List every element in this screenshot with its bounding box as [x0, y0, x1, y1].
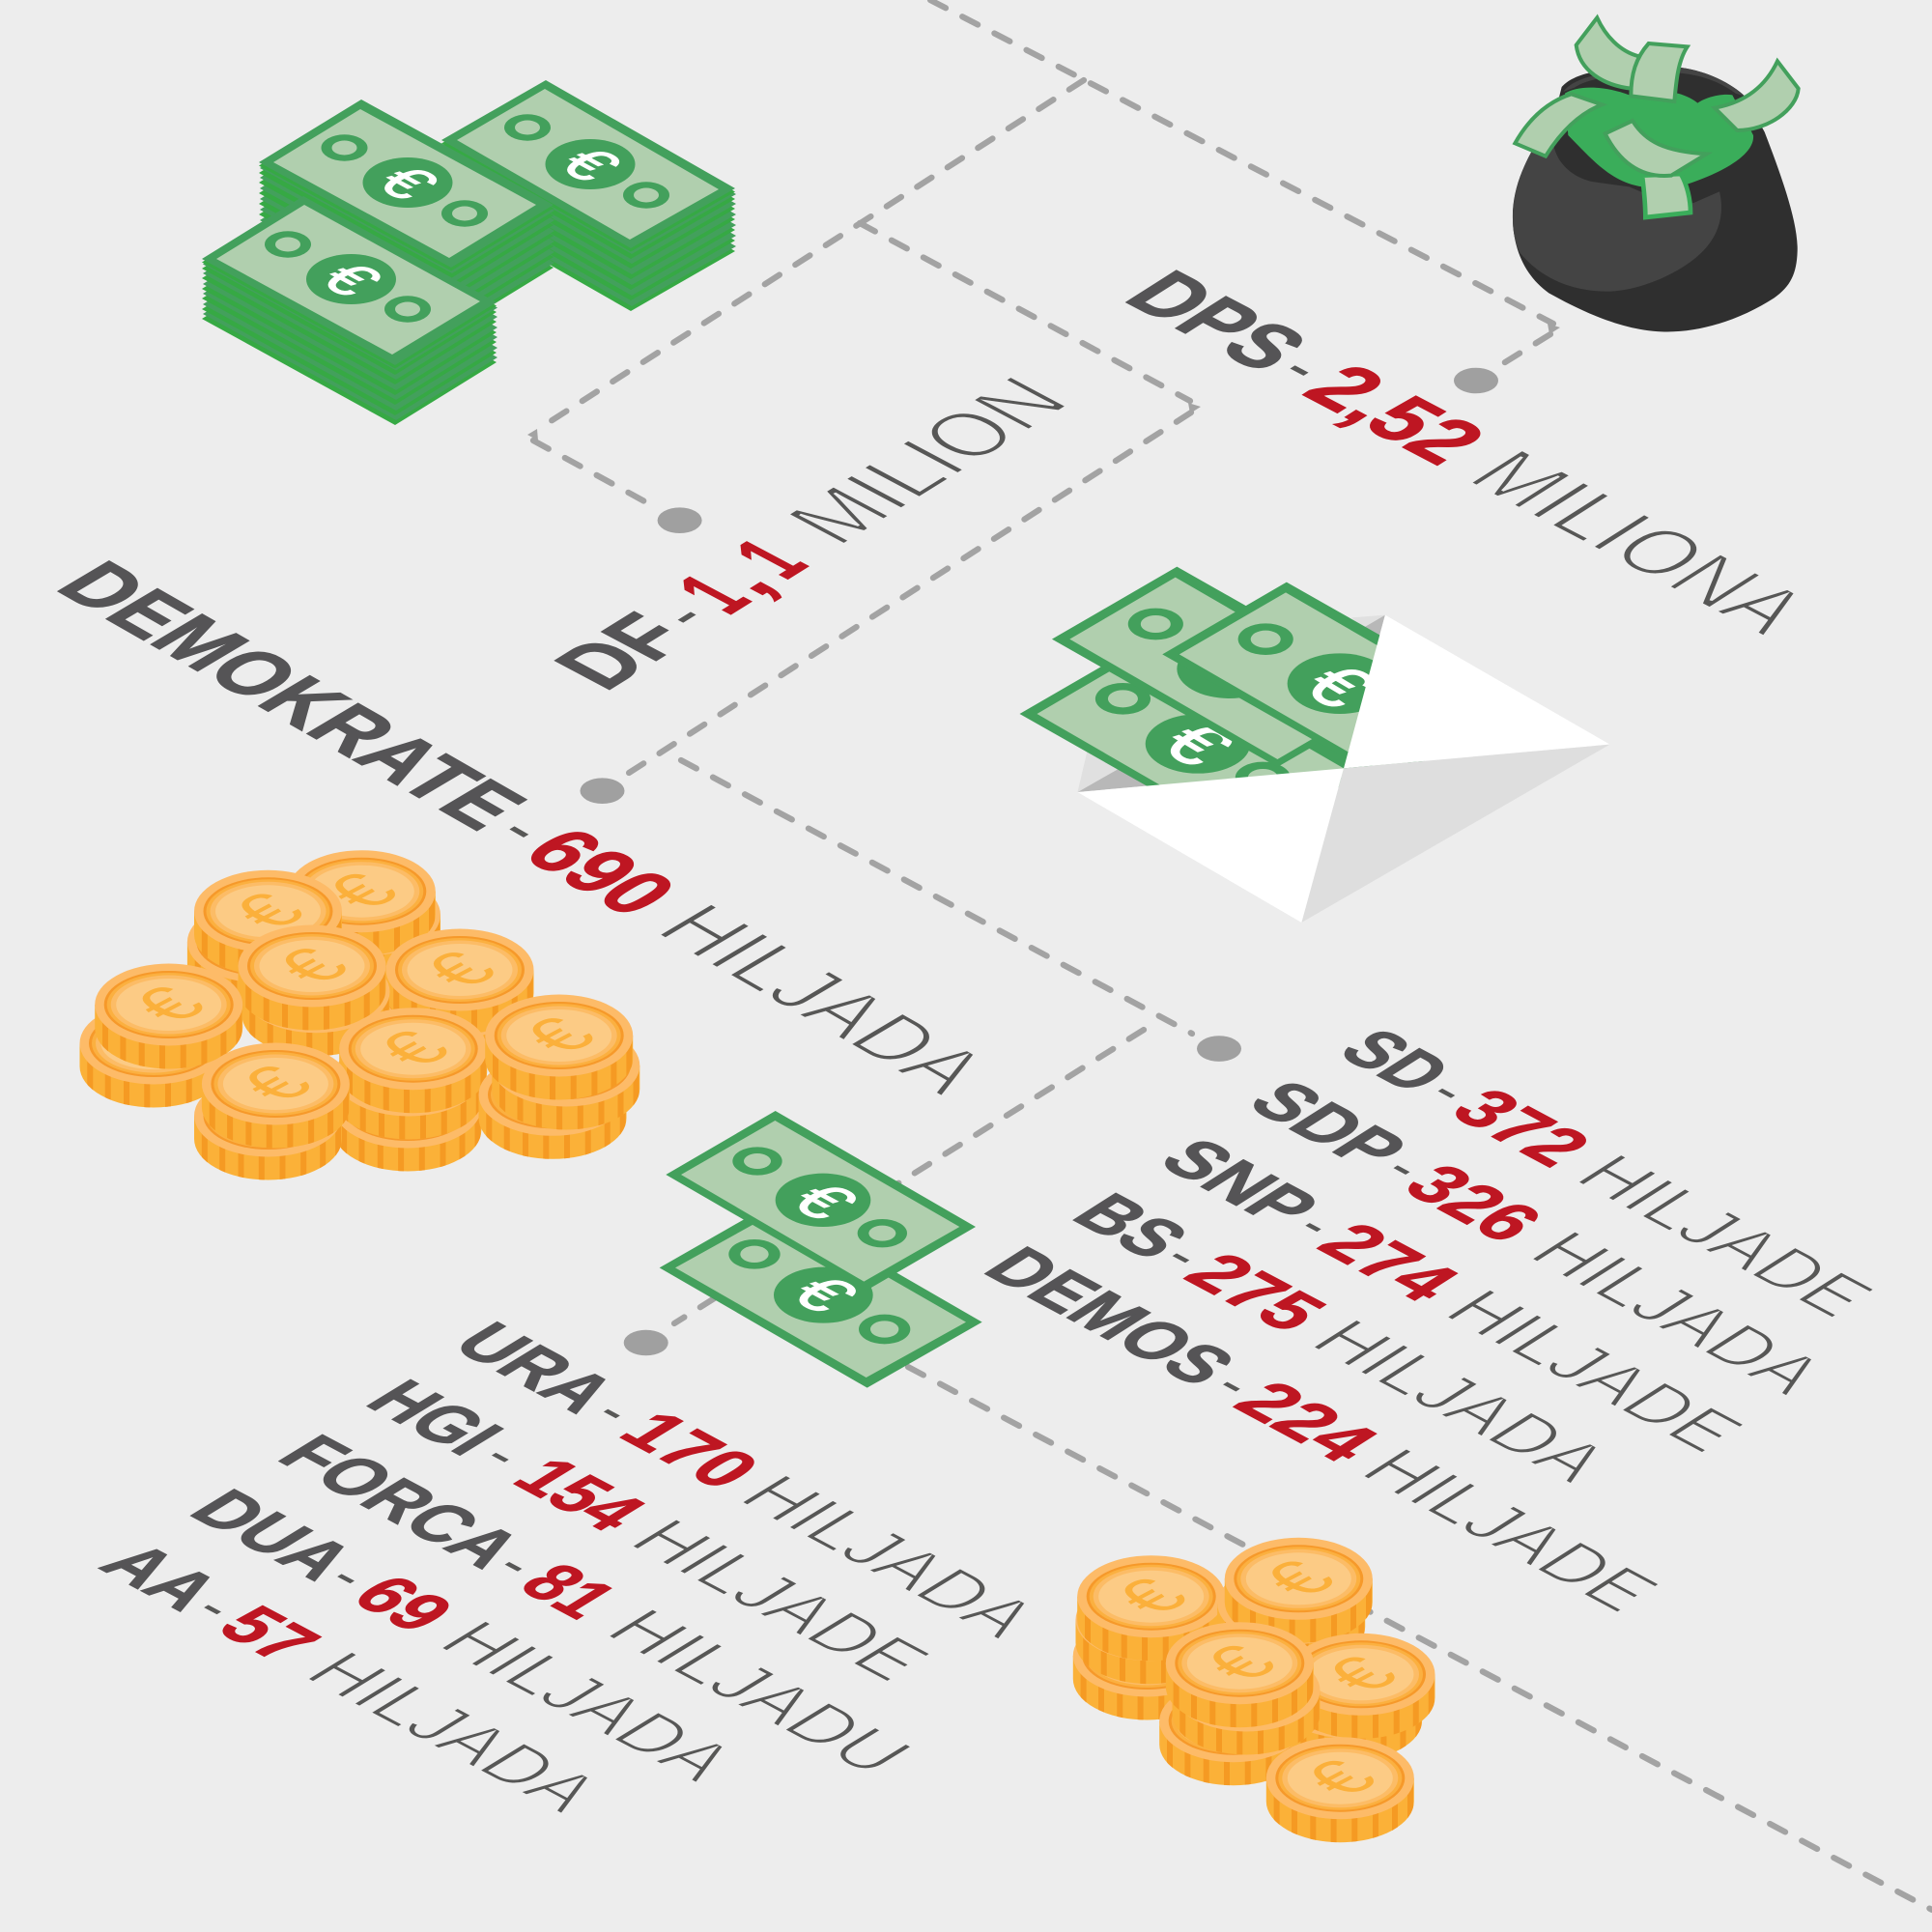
- icon: large coin pile: €: [505, 1008, 614, 1065]
- amount: 274: [1301, 1212, 1476, 1313]
- label: HGI 154 hiljade: [349, 1369, 949, 1692]
- label: Demokrate 690 hiljada: -: [473, 798, 577, 859]
- icon: large coin pile: [79, 850, 639, 1183]
- label: SD 372 hiljade: [1321, 1017, 1892, 1328]
- icon: large coin pile: €: [115, 977, 224, 1034]
- label: DUA 69 hiljada: [172, 1478, 755, 1792]
- lower banknote: [660, 1202, 982, 1388]
- label: DF 1,1 milion: -: [628, 585, 734, 643]
- icon: large coin pile: €: [214, 883, 324, 940]
- banknote: middle: [1052, 567, 1403, 767]
- party name: DPS: [1106, 258, 1328, 384]
- unit: HILJADA: [1293, 1308, 1629, 1493]
- banknote: front left: [1020, 641, 1370, 841]
- amount: 57: [201, 1595, 337, 1673]
- amount: 1: [657, 563, 770, 625]
- front stack: [202, 196, 497, 425]
- icon: envelope with banknotes: [1020, 567, 1610, 923]
- back right stack: €: [544, 139, 637, 189]
- back left stack: €: [361, 157, 454, 208]
- label: DPS 2,52 miliona: -: [1255, 336, 1355, 398]
- unit: HILJADA: [421, 1609, 755, 1792]
- icon: large coin pile: €: [406, 942, 515, 999]
- connector dots: [580, 368, 1498, 1355]
- icon: small coin pile: €: [1245, 1550, 1354, 1607]
- party name: HGI: [350, 1370, 520, 1465]
- banknote: right: €: [1285, 653, 1395, 719]
- upper banknote: [666, 1111, 976, 1291]
- amount: 170: [603, 1401, 778, 1499]
- label: BS 275 hiljada: [1055, 1181, 1629, 1493]
- party name: DEMOS: [967, 1236, 1252, 1396]
- unit: HILJADA: [722, 1463, 1057, 1649]
- label: HGI 154 hiljade: -: [461, 1429, 549, 1481]
- label: SDP 326 hiljada: [1231, 1068, 1844, 1406]
- party name: AA: [83, 1533, 239, 1621]
- label: Demos 224 hiljade: [967, 1236, 1677, 1623]
- amount: 224: [1217, 1371, 1396, 1473]
- icon: small coin pile: [1073, 1538, 1435, 1846]
- label: Forca 81 hiljadu: -: [473, 1537, 562, 1590]
- back right stack: [441, 80, 736, 311]
- back left stack: [259, 99, 554, 330]
- unit: MILIONA: [1448, 437, 1832, 647]
- label: DF 1,1 milion: [532, 364, 1091, 701]
- label: URA 170 hiljada: -: [573, 1384, 661, 1437]
- party name: DF: [534, 601, 708, 701]
- label: SNP 274 hiljade: -: [1275, 1198, 1360, 1251]
- icon: two banknotes: [660, 1111, 982, 1388]
- front stack: €: [304, 254, 397, 304]
- amount: [657, 527, 827, 625]
- amount: 1: [714, 527, 827, 590]
- label: AA 57 hiljada: [82, 1532, 620, 1823]
- amount: 154: [497, 1447, 663, 1542]
- label: Forca 81 hiljadu: [261, 1424, 930, 1785]
- label: DPS 2,52 miliona: [1105, 257, 1832, 647]
- dashed connector lines: [527, 0, 1932, 1910]
- unit: MILION: [765, 364, 1091, 557]
- party name: BS: [1056, 1183, 1206, 1269]
- party name: DEMOKRATE: [38, 549, 547, 841]
- party name: URA: [437, 1311, 635, 1423]
- amount: 326: [1387, 1153, 1559, 1253]
- icon: large coin pile: €: [359, 1021, 469, 1078]
- amount: 69: [335, 1565, 471, 1642]
- label: SD 372 hiljade: -: [1407, 1064, 1494, 1117]
- amount: ,: [687, 548, 794, 607]
- label: AA 57 hiljada: -: [173, 1580, 262, 1634]
- amount: 81: [502, 1552, 635, 1629]
- party name: SD: [1322, 1018, 1468, 1103]
- icon: large coin pile: €: [308, 864, 417, 921]
- lower banknote: €: [773, 1267, 873, 1321]
- icon: small coin pile: €: [1287, 1750, 1396, 1807]
- icon: large coin pile: €: [258, 938, 367, 995]
- icon: small coin pile: €: [1097, 1569, 1207, 1626]
- icon: small coin pile: €: [1307, 1646, 1416, 1703]
- party name: SDP: [1232, 1070, 1424, 1180]
- icon: black money bag: [1513, 17, 1799, 331]
- upper banknote: €: [773, 1175, 873, 1229]
- banknote: right: [1162, 582, 1512, 782]
- amount: 275: [1168, 1242, 1343, 1343]
- label: Demos 224 hiljade: -: [1192, 1357, 1279, 1410]
- icon: large coin pile: €: [222, 1056, 331, 1113]
- unit: HILJADE: [1344, 1437, 1677, 1623]
- unit: HILJADE: [612, 1508, 949, 1692]
- label: DUA 69 hiljada: -: [306, 1549, 395, 1603]
- party name: SNP: [1143, 1128, 1336, 1237]
- party name: DUA: [173, 1479, 373, 1590]
- unit: HILJADA: [288, 1640, 620, 1823]
- unit: HILJADU: [588, 1598, 930, 1785]
- amount: 2,52: [1285, 352, 1506, 477]
- label: SDP 326 hiljada: -: [1363, 1141, 1449, 1194]
- label: URA 170 hiljada: [436, 1311, 1057, 1649]
- icon: small coin pile: €: [1186, 1635, 1295, 1692]
- banknote: front left: €: [1143, 711, 1253, 777]
- amount: 372: [1435, 1078, 1607, 1178]
- party name: FORCA: [261, 1424, 540, 1578]
- label: BS 275 hiljada: -: [1142, 1229, 1229, 1282]
- amount: 690: [504, 815, 697, 928]
- unit: HILJADA: [637, 891, 1011, 1107]
- unit: HILJADE: [1427, 1278, 1762, 1463]
- icon: stacks of banknotes: [202, 80, 736, 425]
- label: SNP 274 hiljade: [1142, 1126, 1762, 1463]
- label: Demokrate 690 hiljada: [37, 548, 1011, 1107]
